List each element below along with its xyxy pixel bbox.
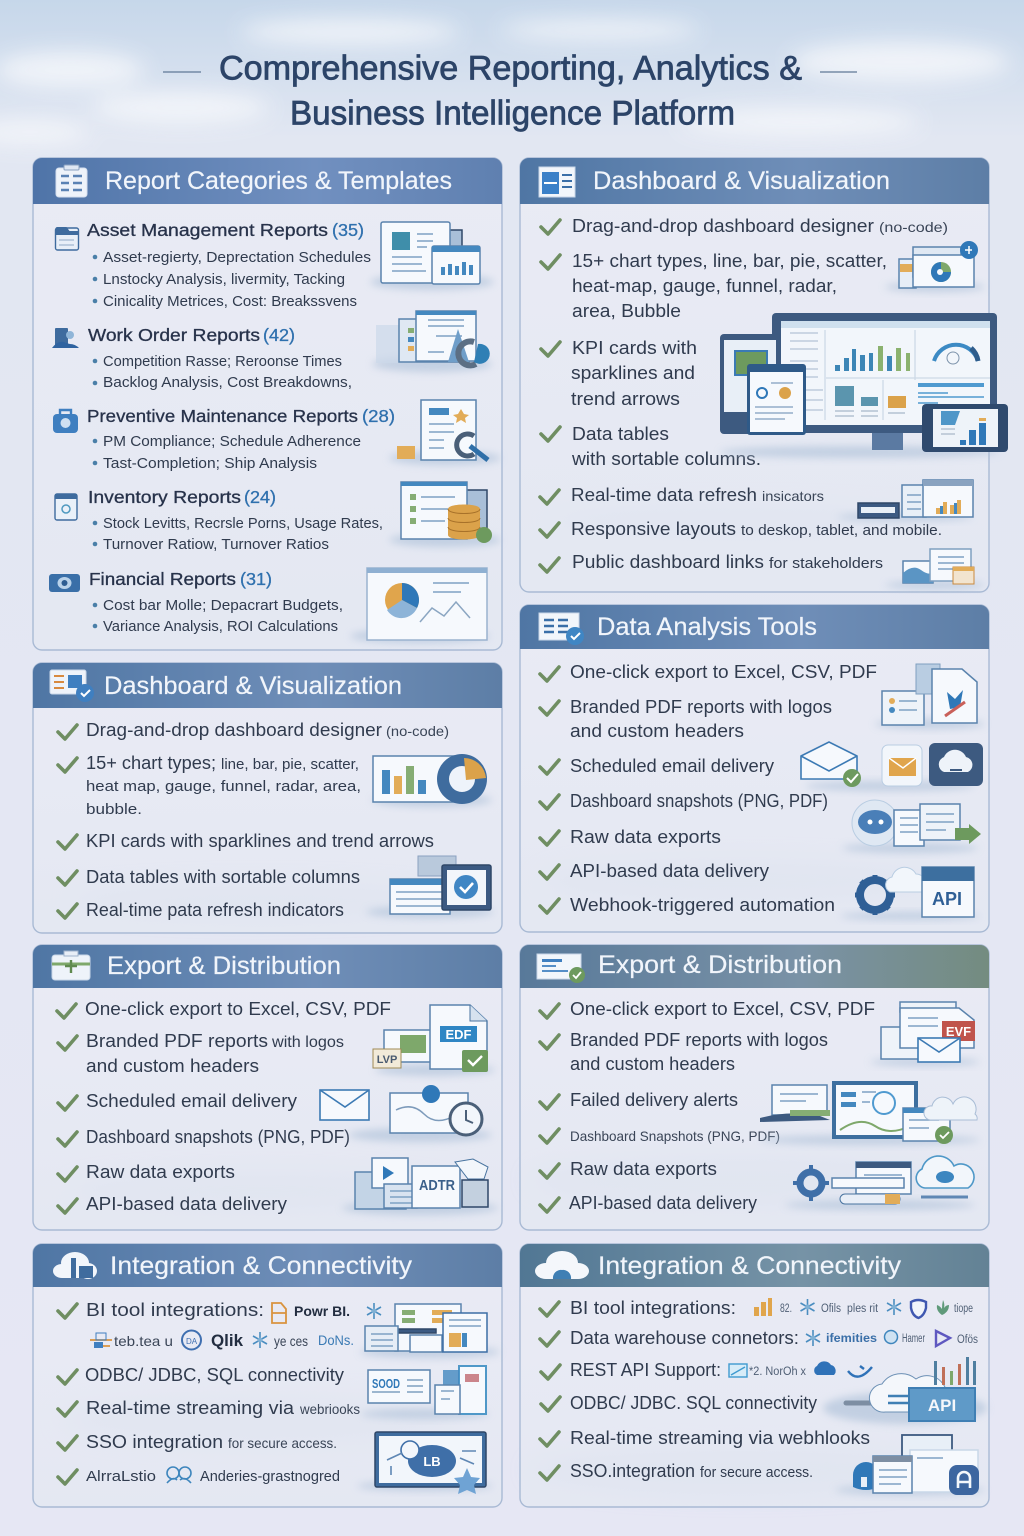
illustration: data table and checked screen xyxy=(366,856,494,918)
checklist: dashboard right: with sortable columns. xyxy=(571,449,761,469)
checklist: dashboard right: heat-map, gauge, funnel, radar, xyxy=(572,276,837,296)
checklist: integration left: ODBC/ JDBC, SQL connectivity xyxy=(85,1365,344,1385)
icon: cloud integration xyxy=(53,1252,97,1279)
checklist: integration right: ODBC/ JDBC. SQL connectivity xyxy=(570,1393,817,1413)
logos: BI tools right: ples rit xyxy=(847,1303,879,1315)
checklist: export left: API-based data delivery xyxy=(86,1194,287,1214)
checklist: export left: One-click export to Excel, CSV, PDF xyxy=(85,999,391,1019)
checklist: export right: Raw data exports xyxy=(570,1159,717,1179)
illustration: EDF export files xyxy=(373,1005,495,1076)
panel header: export right: Export & Distribution xyxy=(598,951,842,979)
bullets: work orders xyxy=(93,354,352,391)
illustration: API gear and cloud xyxy=(840,867,980,920)
checklist: dashboard right: for stakeholders xyxy=(769,556,883,572)
illustration: document with chart xyxy=(370,222,494,290)
logos: BI tools left: DoNs. xyxy=(318,1332,354,1348)
checklist: data analysis tools: Dashboard snapshots (PNG, PDF) xyxy=(570,791,828,811)
checklist: data analysis tools: API-based data delivery xyxy=(570,861,769,881)
illustration: gear, documents and cloud xyxy=(785,1156,975,1210)
checklist: dashboard right: Responsive layouts xyxy=(571,519,736,539)
checklist: export right: Branded PDF reports with logos xyxy=(570,1030,828,1050)
checklist: dashboard left: Drag-and-drop dashboard designer xyxy=(86,720,382,740)
checklist: data analysis tools: One-click export to Excel, CSV, PDF xyxy=(570,662,877,682)
panel header: export right xyxy=(520,945,989,988)
illustration: failed delivery alerts dashboard xyxy=(760,1081,980,1145)
bullets: inventory: Stock Levitts, Recrsle Porns, Usage Rates, xyxy=(103,516,383,532)
bullets: asset management: Cinicality Metrices, Cost: Breakssvens xyxy=(103,294,357,310)
logos: BI tools left: DA xyxy=(186,1337,198,1346)
panel header: dashboard right: Dashboard & Visualization xyxy=(593,167,890,195)
checklist: integration right: BI tool integrations: xyxy=(570,1298,736,1318)
report group: preventive maintenance xyxy=(53,400,501,472)
checklist: integration left: Real-time streaming via xyxy=(86,1398,295,1418)
checklist: data analysis tools: Scheduled email delivery xyxy=(570,756,774,776)
illustration: SQL screen xyxy=(361,1366,489,1419)
logos: data warehouses: Ofös xyxy=(957,1334,978,1346)
checklist: dashboard right: trend arrows xyxy=(571,389,680,409)
checklist: export right: Failed delivery alerts xyxy=(570,1090,738,1110)
logos: BI tools right: 82. xyxy=(780,1303,792,1315)
checklist: dashboard right: insicators xyxy=(762,488,824,504)
checklist: export right: One-click export to Excel, CSV, PDF xyxy=(570,999,875,1019)
checklist: integration left xyxy=(58,1300,360,1485)
icon: Alrralstio people logo xyxy=(167,1467,191,1483)
panel header: dashboard left: Dashboard & Visualization xyxy=(104,672,402,700)
checklist: export left: with logos xyxy=(271,1034,344,1051)
logos: BI tools left: ye ces xyxy=(274,1333,308,1349)
icon: cloud xyxy=(535,1251,589,1279)
checklist: export right: Dashboard Snapshots (PNG, PDF) xyxy=(570,1128,780,1144)
title xyxy=(163,50,857,132)
checklist: dashboard left: Data tables with sortable columns xyxy=(86,867,360,887)
heading: financial reports: Financial Reports xyxy=(89,569,236,589)
checklist: integration right: SSO.integration xyxy=(570,1461,695,1481)
illustration: export documents xyxy=(875,664,985,729)
checklist: dashboard right: KPI cards with xyxy=(572,338,697,358)
icon: data table with check xyxy=(539,613,584,645)
checklist: dashboard right xyxy=(540,216,948,572)
checklist: integration left: AlrraLstio xyxy=(86,1469,156,1485)
logos: REST API xyxy=(729,1361,872,1378)
heading: work order reports: (42) xyxy=(263,325,295,345)
icon: financial banknote xyxy=(49,574,80,592)
heading: asset management reports: Asset Management Reports xyxy=(87,220,328,240)
panel header: integration right: Integration & Connectivity xyxy=(598,1252,902,1280)
bullets: work orders: Competition Rasse; Reroonse Times xyxy=(103,354,342,370)
bullets: work orders: Backlog Analysis, Cost Breakdowns, xyxy=(103,375,352,391)
logos: BI tools left: Qlik xyxy=(211,1331,244,1350)
checklist: dashboard left xyxy=(58,720,449,920)
heading: inventory reports: (24) xyxy=(244,487,276,507)
heading: preventive maintenance reports: Preventive Maintenance Reports xyxy=(87,406,358,426)
checklist: data analysis tools: Branded PDF reports with logos xyxy=(570,697,832,717)
title: Comprehensive Reporting, Analytics & xyxy=(219,50,802,88)
panel header: report categories xyxy=(33,158,502,204)
checklist: integration left: Anderies-grastnogred xyxy=(200,1469,340,1485)
checklist: export left: and custom headers xyxy=(86,1056,259,1076)
panel: dashboard and visualization (right) xyxy=(520,158,1008,592)
heading: asset management reports: (35) xyxy=(332,220,364,240)
illustration: secure access documents and lock xyxy=(835,1435,985,1495)
logos: data warehouses xyxy=(806,1330,978,1346)
checklist: dashboard right: Data tables xyxy=(572,424,669,444)
illustration: work order screen xyxy=(372,311,492,372)
checklist: dashboard left: (no-code) xyxy=(386,723,449,739)
illustration: snapshot screens xyxy=(842,800,981,853)
illustration: email and cloud tiles xyxy=(801,742,983,791)
checklist: dashboard left: 15+ chart types; xyxy=(86,753,216,773)
report group: inventory xyxy=(55,482,501,553)
report group: work orders xyxy=(52,311,492,391)
bullets: financial: Variance Analysis, ROI Calculations xyxy=(103,619,338,635)
illustration: raw data folders with ADTR: ADTR xyxy=(419,1177,455,1194)
checklist: export left: Branded PDF reports xyxy=(86,1031,268,1051)
illustration: API gear and cloud: API xyxy=(932,889,962,909)
illustration: raw data folders with ADTR xyxy=(342,1158,498,1215)
illustration: maintenance checklist xyxy=(389,400,501,465)
bullets: asset management: Asset-regierty, Deprectation Schedules xyxy=(103,250,371,266)
checklist: integration right: REST API Support: xyxy=(570,1360,721,1380)
illustration: financial pie chart on screen xyxy=(350,568,490,643)
illustration: public dashboard links xyxy=(885,549,985,589)
illustration: EVF export with envelope: EVF xyxy=(946,1024,971,1039)
heading: work order reports: Work Order Reports xyxy=(88,325,260,345)
illustration: monitor, tablet and phone with dashboards xyxy=(720,313,1008,458)
checklist: dashboard right: Public dashboard links xyxy=(572,552,764,572)
logos: BI tools left xyxy=(90,1303,381,1350)
panel header: integration left xyxy=(33,1244,502,1287)
checklist: dashboard left: KPI cards with sparklines and trend arrows xyxy=(86,831,434,851)
illustration: API cloud with bars xyxy=(823,1357,987,1424)
panel header: report categories: Report Categories & Templates xyxy=(105,167,452,195)
panel header: data analysis tools: Data Analysis Tools xyxy=(597,613,817,641)
checklist: export right xyxy=(540,999,875,1213)
checklist: integration right: for secure access. xyxy=(700,1465,813,1481)
logos: BI tools left: Powr BI. xyxy=(294,1303,350,1319)
heading: financial reports: (31) xyxy=(240,569,272,589)
bullets: preventive maintenance xyxy=(93,434,361,472)
panel: integration and connectivity (right) xyxy=(520,1244,989,1507)
illustration: email and clock xyxy=(320,1085,492,1142)
checklist: dashboard left: Real-time pata refresh indicators xyxy=(86,900,344,920)
panel header: export left xyxy=(33,945,502,988)
icon: dashboard report xyxy=(539,167,575,197)
bullets: preventive maintenance: Tast-Completion; Ship Analysis xyxy=(103,456,317,472)
panel header: integration right xyxy=(520,1244,989,1287)
checklist: dashboard right: Drag-and-drop dashboard designer xyxy=(572,216,874,236)
checklist: dashboard left: heat map, gauge, funnel, radar, area, xyxy=(86,779,361,795)
logos: data warehouses: Hamer xyxy=(902,1333,925,1345)
logos: data warehouses: ifemities xyxy=(826,1333,877,1345)
checklist: dashboard right: Real-time data refresh xyxy=(571,485,757,505)
checklist: integration right: Data warehouse connetors: xyxy=(570,1328,799,1348)
logos: BI tools right: Ofils xyxy=(821,1303,841,1315)
bullets: asset management xyxy=(93,250,371,310)
icon: folder xyxy=(56,227,78,250)
report group: asset management xyxy=(56,220,494,310)
icon: export screen with check xyxy=(537,954,585,983)
checklist: export left: Raw data exports xyxy=(86,1162,235,1182)
checklist: integration left: webriooks xyxy=(299,1401,360,1417)
illustration: chart card with pie xyxy=(372,754,492,807)
heading: inventory reports: Inventory Reports xyxy=(88,487,241,507)
icon: toolbox xyxy=(53,410,78,433)
illustration: BI dashboards xyxy=(360,1304,500,1358)
bullets: preventive maintenance: PM Compliance; Schedule Adherence xyxy=(103,434,361,450)
bullets: inventory xyxy=(93,516,383,553)
illustration: pie chart card with badge xyxy=(885,241,985,292)
checklist: integration left: SSO integration xyxy=(86,1432,223,1452)
icon: work order worker xyxy=(52,328,79,348)
report group: financial xyxy=(49,568,490,643)
panel: data analysis tools xyxy=(520,605,989,932)
logos: REST API: *2. NorOh x xyxy=(749,1366,806,1378)
icon: export toolbox xyxy=(52,951,90,980)
panel: export and distribution (right) xyxy=(520,945,989,1230)
checklist: integration right xyxy=(540,1298,870,1481)
logos: BI tools left: teb.tea u xyxy=(114,1333,173,1349)
checklist: integration left: BI tool integrations: xyxy=(86,1300,264,1320)
panel header: dashboard left xyxy=(33,663,502,708)
panel: report categories and templates xyxy=(33,158,502,650)
checklist: data analysis tools: Webhook-triggered automation xyxy=(570,895,835,915)
illustration: API cloud with bars: API xyxy=(928,1396,956,1415)
panel header: data analysis tools xyxy=(520,605,989,649)
illustration: SQL screen: SOOD xyxy=(372,1376,400,1391)
panel: export and distribution (left) xyxy=(33,945,502,1230)
icon: dashboard with check xyxy=(50,670,94,702)
checklist: dashboard left: bubble. xyxy=(86,802,142,818)
checklist: dashboard right: sparklines and xyxy=(571,363,695,383)
illustration: EDF export files: EDF xyxy=(446,1027,472,1042)
illustration: real-time bar chart cards xyxy=(837,480,973,521)
panel header: export left: Export & Distribution xyxy=(107,952,341,980)
panel header: integration left: Integration & Connectivity xyxy=(110,1252,413,1280)
bullets: asset management: Lnstocky Analysis, livermity, Tacking xyxy=(103,272,345,288)
checklist: dashboard right: to deskop, tablet, and mobile. xyxy=(741,523,942,539)
bullets: financial: Cost bar Molle; Depacrart Budgets, xyxy=(103,598,343,614)
checklist: dashboard right: area, Bubble xyxy=(572,301,681,321)
heading: preventive maintenance reports: (28) xyxy=(362,406,395,426)
checklist: data analysis tools: Raw data exports xyxy=(570,827,721,847)
logos: BI tools right xyxy=(754,1298,973,1318)
bullets: inventory: Turnover Ratiow, Turnover Ratios xyxy=(103,537,329,553)
illustration: inventory database xyxy=(389,482,501,547)
panel: integration and connectivity (left) xyxy=(33,1244,502,1507)
bullets: financial xyxy=(93,598,343,635)
checklist: dashboard right: 15+ chart types, line, bar, pie, scatter, xyxy=(572,251,887,271)
illustration: LB screen: LB xyxy=(423,1454,441,1469)
logos: BI tools right: tiope xyxy=(954,1303,973,1315)
checklist: export left: Dashboard snapshots (PNG, PDF) xyxy=(86,1127,350,1147)
icon: inventory document xyxy=(55,494,77,520)
checklist: dashboard right: (no-code) xyxy=(879,219,948,235)
checklist: data analysis tools: and custom headers xyxy=(570,721,744,741)
icon: report clipboard xyxy=(56,165,87,197)
checklist: export right: API-based data delivery xyxy=(569,1193,757,1213)
checklist: export left: Scheduled email delivery xyxy=(86,1091,297,1111)
panel header: dashboard right xyxy=(520,158,989,204)
checklist: integration right: Real-time streaming via webhlooks xyxy=(570,1428,870,1448)
illustration: LB screen xyxy=(357,1432,493,1494)
checklist: export left xyxy=(57,999,391,1214)
illustration: EDF export files: LVP xyxy=(377,1054,397,1066)
panel: dashboard and visualization (left) xyxy=(33,663,502,933)
checklist: export right: and custom headers xyxy=(570,1054,735,1074)
checklist: dashboard left: line, bar, pie, scatter, xyxy=(221,757,359,773)
illustration: EVF export with envelope xyxy=(870,1002,980,1066)
checklist: data analysis tools xyxy=(540,662,877,915)
checklist: integration left: for secure access. xyxy=(228,1435,337,1451)
title: Business Intelligence Platform xyxy=(290,94,735,132)
